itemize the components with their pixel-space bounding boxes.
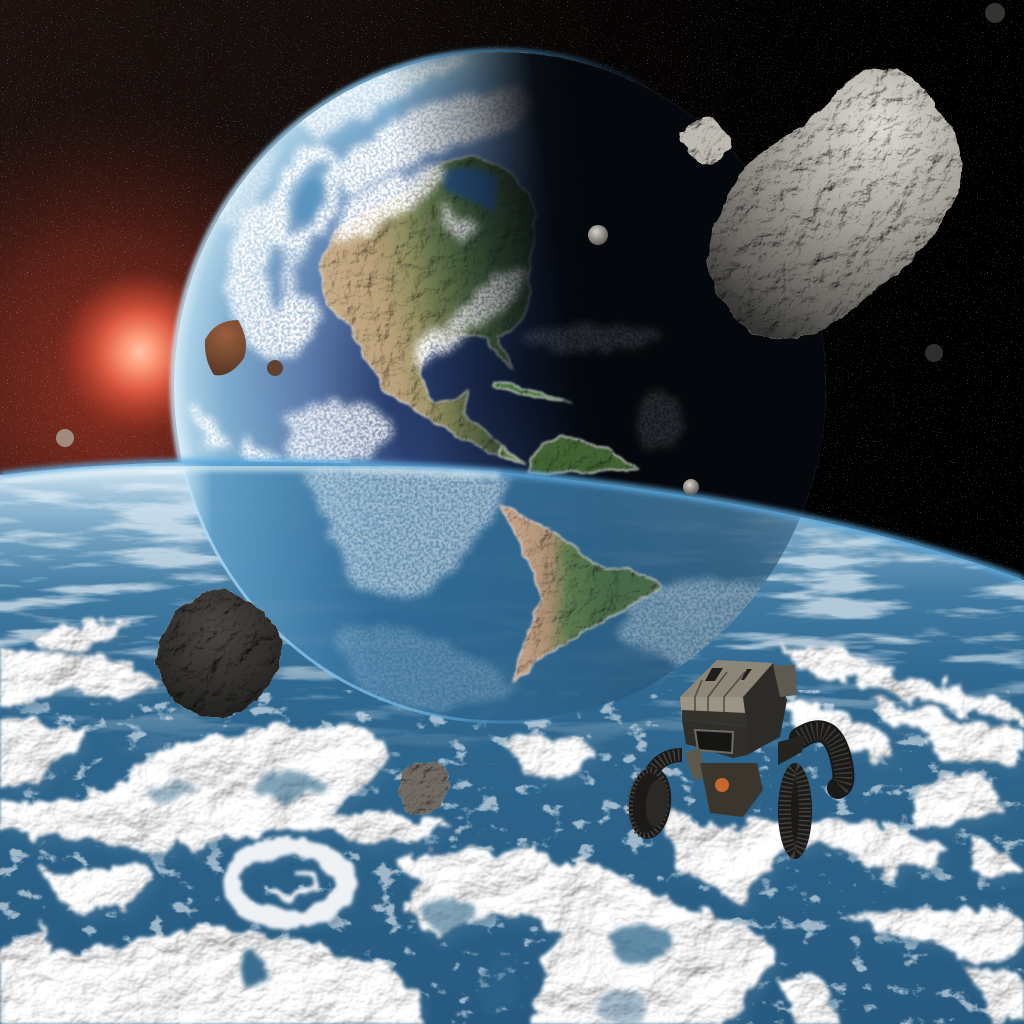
rover panel grooves <box>695 672 745 714</box>
planet limb through horizon <box>182 464 614 724</box>
night side cloud traces <box>520 324 684 450</box>
rover top face <box>680 660 773 697</box>
distant moon <box>56 429 74 447</box>
tiny asteroid <box>267 360 283 376</box>
rover left track arm <box>650 755 682 775</box>
brown asteroid <box>205 320 246 375</box>
small asteroid top <box>678 118 732 163</box>
hurricane swirl <box>247 147 344 340</box>
rover joint <box>685 748 706 780</box>
rover side box <box>773 665 797 697</box>
rover right wheel <box>778 763 812 859</box>
rover top vents <box>705 668 752 681</box>
south america <box>500 505 662 682</box>
rover orange light <box>715 778 729 792</box>
rover left wheel <box>625 765 675 841</box>
atmosphere outer glow <box>167 46 651 462</box>
pebble asteroid near planet <box>588 225 608 245</box>
large asteroid <box>708 67 962 339</box>
lower planet clouds <box>300 467 790 710</box>
north america <box>320 157 537 463</box>
rover lower module <box>700 763 763 817</box>
rover joint arm <box>778 735 805 765</box>
rover screen <box>695 730 733 753</box>
rover front panels <box>680 697 747 727</box>
cloud banks <box>0 625 1024 1024</box>
high clouds <box>190 55 532 480</box>
small grey asteroid <box>400 763 448 813</box>
distant rock top right <box>985 3 1005 23</box>
distant rock right <box>925 344 943 362</box>
swirl eye <box>294 178 322 222</box>
rover robot <box>625 660 843 859</box>
horizon atmosphere glow <box>0 462 1024 580</box>
rover side panel <box>743 663 787 755</box>
clouds over land <box>330 160 530 375</box>
rover right curved track <box>800 731 843 788</box>
tiny asteroid at horizon <box>683 479 699 495</box>
rover lower face <box>682 720 747 758</box>
cloud gaps showing ocean <box>148 771 670 1024</box>
red sun glow <box>55 267 225 437</box>
rover sensor band <box>682 710 747 727</box>
large planet upper hemisphere <box>165 50 845 723</box>
cyclone <box>230 847 346 919</box>
caribbean and northern south america <box>493 381 640 475</box>
hudson bay <box>442 168 498 212</box>
large planet lower hemisphere <box>154 462 800 724</box>
dark asteroid <box>157 588 283 716</box>
foreground earth surface <box>0 450 1024 1024</box>
